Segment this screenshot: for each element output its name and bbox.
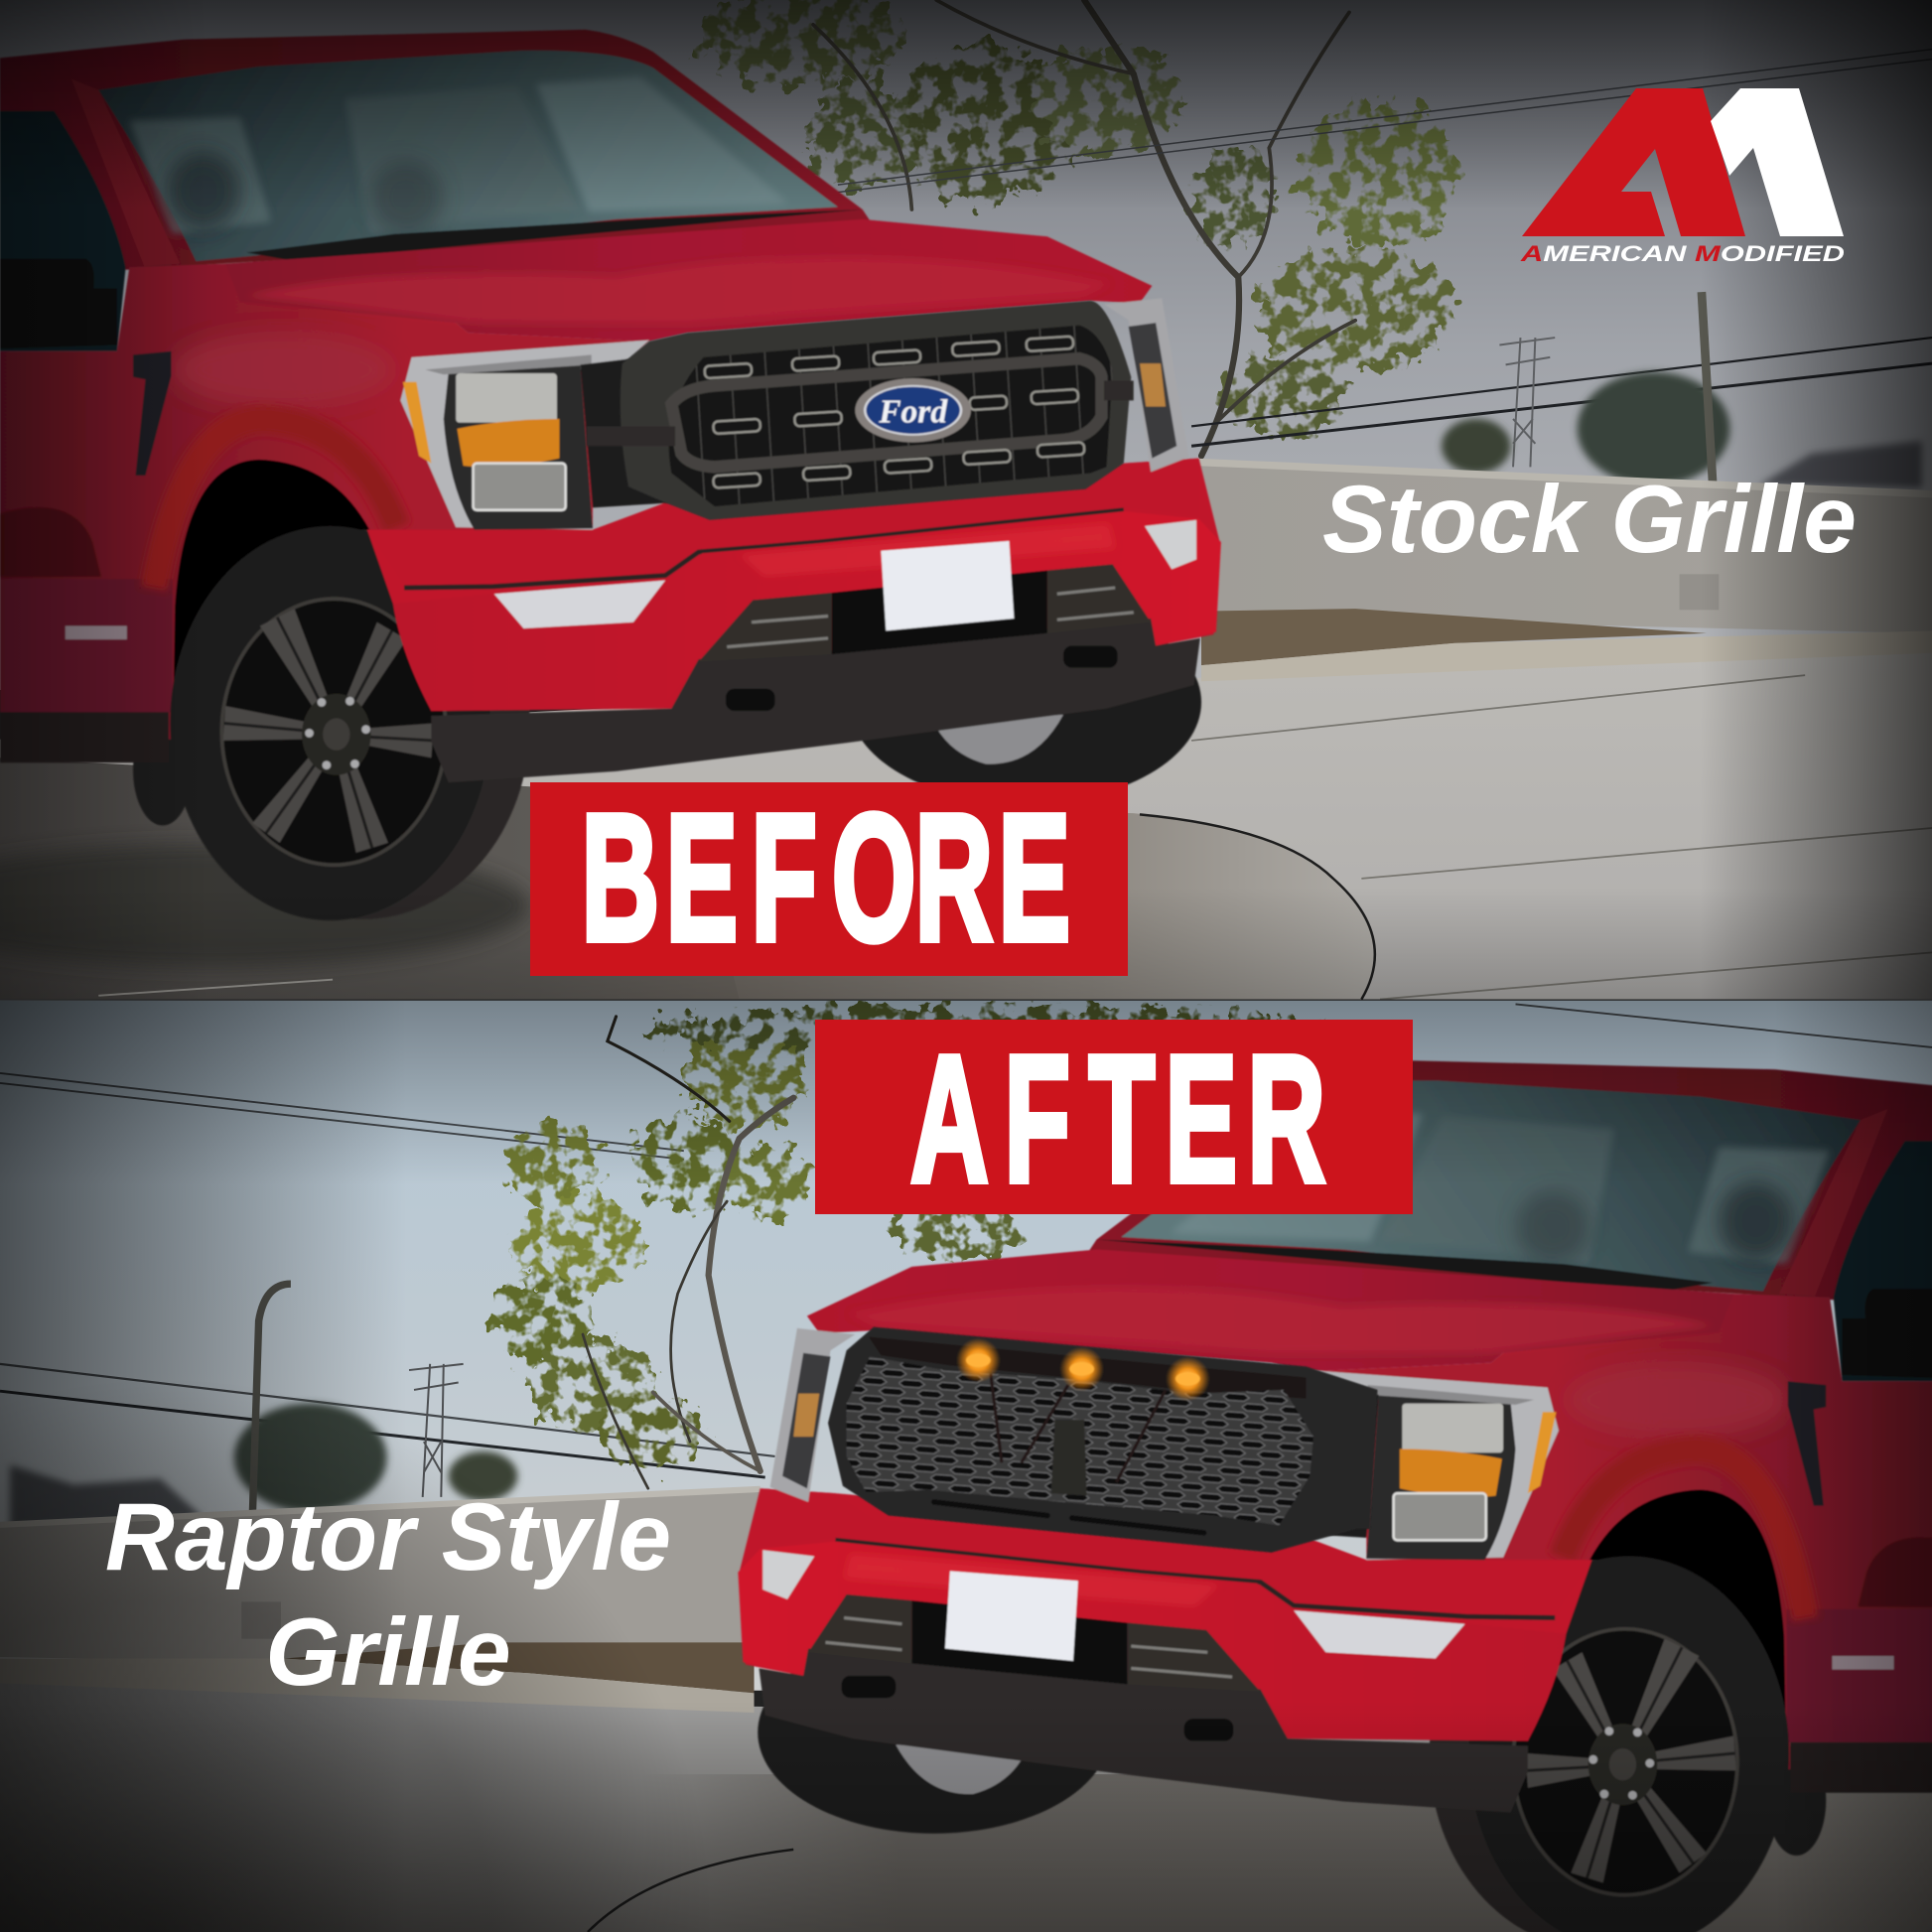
wheel arch lip	[154, 419, 397, 589]
lower intake right	[1047, 564, 1151, 633]
grille shell	[828, 1327, 1378, 1553]
centre strip	[1051, 1420, 1087, 1496]
right headlight	[1104, 298, 1189, 472]
skid scratch	[98, 980, 333, 996]
label: stock grille: Stock Grille	[1322, 465, 1857, 573]
wires	[0, 1004, 1932, 1477]
skid circle on road	[690, 801, 1375, 1000]
side step	[0, 712, 169, 762]
upper bumper band	[367, 459, 1199, 586]
body side and fender	[0, 264, 649, 740]
amber light right	[1166, 1356, 1210, 1401]
right fog light	[1145, 520, 1196, 569]
lower bumper	[431, 619, 1200, 782]
before banner: BEFORE	[581, 777, 1070, 978]
side badge	[66, 625, 127, 639]
honeycomb mesh	[847, 1356, 1313, 1525]
wall drain notch	[241, 1601, 281, 1639]
fender vent	[133, 351, 172, 476]
ford oval badge: Ford	[878, 394, 948, 431]
grille centre loop	[671, 358, 1102, 467]
stock grille	[587, 301, 1134, 520]
logo white 1	[1711, 88, 1844, 236]
grille top visor	[869, 1337, 1307, 1399]
grille bar chips	[704, 337, 1084, 488]
lower intake slot	[832, 571, 1047, 654]
wall top highlight	[1195, 459, 1932, 497]
band crease	[404, 510, 1124, 588]
logo wordmark: A MERICAN M ODIFIED	[1520, 241, 1845, 266]
label: raptor style grille: Raptor Style	[105, 1482, 671, 1590]
fog light	[494, 581, 665, 628]
licence plate	[881, 541, 1014, 630]
concrete wall	[1195, 461, 1932, 633]
distant trees and hills	[1442, 372, 1922, 487]
tree foliage	[490, 1006, 1330, 1472]
after banner	[815, 1019, 1413, 1219]
rim	[221, 599, 446, 865]
wheel arch	[173, 460, 431, 752]
curb	[1201, 630, 1932, 681]
curb	[0, 1658, 755, 1713]
pylon	[409, 1364, 464, 1497]
panel: before photo	[0, 0, 1932, 1000]
fender highlight	[173, 333, 394, 407]
sky	[0, 0, 1932, 690]
bumper shine	[740, 523, 1115, 577]
road	[0, 650, 1932, 1000]
rear tyre	[133, 715, 193, 826]
road	[0, 1666, 1932, 1932]
ground under truck	[640, 1774, 1932, 1932]
side window	[0, 111, 126, 351]
lower door	[0, 579, 173, 712]
panel: after photo	[0, 1001, 1932, 1932]
logo red A	[1522, 88, 1745, 236]
road seam curve	[588, 1850, 793, 1932]
front tyre wall	[170, 526, 490, 920]
lamp post	[1702, 292, 1713, 483]
front tyre tread	[198, 530, 530, 919]
truck: modified front (mirrored)	[738, 1059, 1932, 1932]
logo: american modified	[1520, 88, 1845, 266]
label: raptor style grille	[105, 1482, 671, 1706]
raptor style grille	[828, 1327, 1378, 1553]
sky	[0, 1001, 1932, 1691]
concrete wall	[0, 1488, 760, 1661]
grille side housing	[581, 357, 671, 507]
dark wet ground at left	[0, 758, 763, 1000]
vignette	[0, 0, 1932, 1000]
a-pillar shade	[71, 78, 180, 266]
vignette	[0, 1001, 1932, 1932]
door reflection	[0, 507, 101, 577]
tree branches	[583, 1017, 793, 1488]
gravel strip	[283, 1642, 755, 1693]
grille opening	[669, 326, 1113, 506]
intake ribs	[727, 588, 1134, 647]
side mirror	[0, 259, 117, 348]
lower slots	[934, 1502, 1204, 1533]
lamp post	[252, 1284, 291, 1513]
tyre shadow on ground	[0, 844, 530, 967]
distant trees and hills	[10, 1404, 517, 1528]
power lines	[838, 50, 1932, 446]
windshield	[98, 51, 863, 261]
pylon	[1499, 338, 1555, 467]
hood	[225, 219, 1152, 342]
truck: stock front	[0, 30, 1221, 920]
raptor struts	[991, 1374, 1166, 1482]
label: raptor style grille: Grille	[265, 1597, 511, 1706]
ford oval badge	[855, 378, 971, 443]
wall top highlight	[0, 1486, 760, 1528]
roof and pillars	[0, 30, 873, 277]
road seam curve	[1140, 814, 1375, 1000]
tree branches	[813, 0, 1355, 456]
far front tyre	[849, 602, 1201, 803]
amber light left	[956, 1338, 1001, 1382]
amber light centre	[1059, 1346, 1104, 1391]
grille side bars	[587, 380, 1134, 446]
road joint lines	[1191, 675, 1932, 1000]
stock headlight	[400, 341, 649, 530]
bumper base	[367, 459, 1220, 711]
wall drain notch	[1680, 574, 1719, 610]
hood shine	[246, 257, 1109, 323]
after banner: AFTER	[910, 1019, 1325, 1219]
bumper	[393, 511, 1221, 711]
tow hooks	[726, 645, 1118, 711]
lower intake left	[699, 593, 832, 661]
background tree foliage	[696, 0, 1460, 436]
gravel strip	[1201, 609, 1707, 665]
grille frame	[621, 301, 1131, 520]
